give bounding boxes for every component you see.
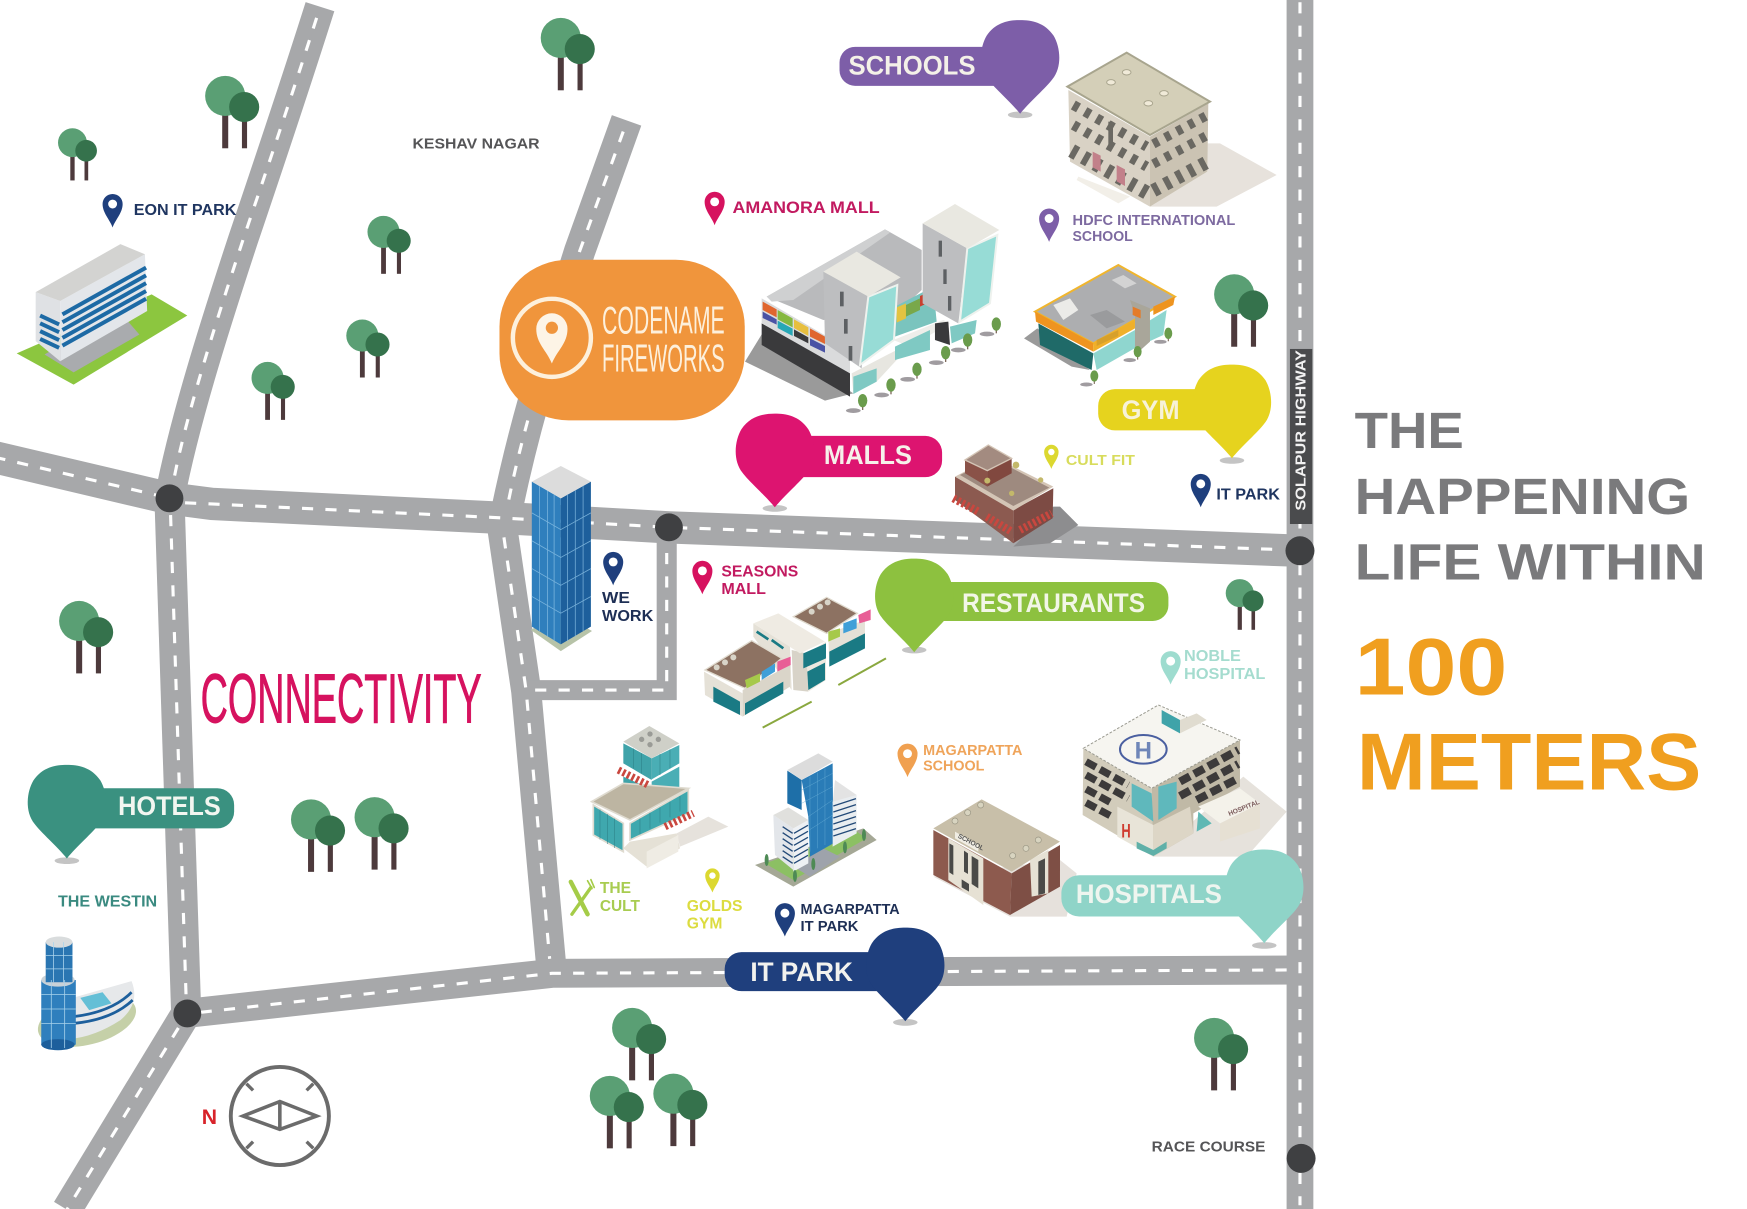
- label: Solapur Highway: [1290, 349, 1312, 524]
- callout pin: Malls: [736, 414, 942, 512]
- callout pin: Restaurants: [875, 559, 1168, 653]
- icon: red hospital H: H: [1121, 821, 1131, 842]
- label: The Westin: THE WESTIN: [58, 893, 157, 910]
- building: Noble Hospital: HOSPITAL: [1227, 799, 1261, 818]
- label: Amanora Mall: [705, 192, 880, 225]
- label: Keshav Nagar: KESHAV NAGAR: [413, 135, 540, 152]
- label: We Work: [602, 552, 654, 625]
- icon: compass: [202, 1067, 329, 1165]
- icon: fork and knife: [571, 880, 594, 914]
- label: Golds Gym: GOLDS: [687, 898, 743, 915]
- building: The Cult: [592, 726, 728, 868]
- title: The Happening Life Within: [1355, 402, 1706, 591]
- callout pin: Restaurants: RESTAURANTS: [962, 588, 1145, 618]
- callout pin: Gym: GYM: [1122, 395, 1180, 425]
- label: The Cult: [571, 880, 640, 915]
- label: IT Park: IT PARK: [1216, 486, 1281, 503]
- callout pin: Gym: [1098, 365, 1271, 464]
- icon: location ring: [513, 299, 591, 377]
- trees: [58, 18, 1268, 1148]
- label: Magarpatta IT Park: MAGARPATTA: [800, 902, 900, 918]
- map base: roads, junctions, trees: [0, 0, 1316, 1209]
- label: Golds Gym: [687, 868, 743, 933]
- label: HDFC International School: SCHOOL: [1073, 229, 1133, 245]
- icon: helipad: H: [1135, 737, 1152, 764]
- junction markers: [156, 484, 1316, 1173]
- label: Noble Hospital: [1161, 648, 1266, 685]
- label: HDFC International School: HDFC INTERNATIONAL: [1073, 213, 1235, 229]
- building: HDFC International School: [1067, 53, 1277, 207]
- callout pin: Malls: MALLS: [824, 440, 912, 470]
- label: Eon IT Park: [103, 194, 237, 227]
- label: Magarpatta School: SCHOOL: [923, 758, 985, 774]
- building: Magarpatta IT Park towers: [755, 753, 877, 887]
- icon: compass: N: [202, 1106, 217, 1129]
- title: 100 Meters: METERS: [1357, 717, 1701, 807]
- title: 100 Meters: [1355, 623, 1701, 807]
- building: Noble Hospital: [1083, 705, 1287, 857]
- callout pin: Hotels: [28, 765, 234, 864]
- label: Seasons Mall: SEASONS: [721, 563, 798, 580]
- label: Cult Fit: CULT FIT: [1066, 452, 1136, 469]
- building: Amanora Mall: [745, 204, 1001, 413]
- callout pin: Schools: [840, 20, 1059, 118]
- callout pin: Hospitals: HOSPITALS: [1076, 879, 1222, 909]
- label: Noble Hospital: NOBLE: [1184, 648, 1241, 665]
- label: Magarpatta IT Park: IT PARK: [800, 919, 859, 935]
- label: Magarpatta IT Park: [775, 902, 900, 937]
- title: The Happening Life Within: HAPPENING: [1355, 468, 1690, 525]
- label: We Work: WE: [602, 590, 630, 607]
- callout pin: IT Park: IT PARK: [750, 957, 854, 987]
- label: Golds Gym: GYM: [687, 916, 722, 933]
- callout: Codename Fireworks: FIREWORKS: [602, 337, 725, 380]
- heading: Connectivity: CONNECTIVITY: [201, 659, 482, 737]
- title: The Happening Life Within: THE: [1355, 402, 1464, 459]
- callout pin: IT Park: [725, 928, 944, 1026]
- label: The Cult: THE: [600, 880, 631, 897]
- label: Seasons Mall: MALL: [721, 581, 766, 598]
- label: IT Park: [1191, 474, 1281, 507]
- label: Eon IT Park: EON IT PARK: [134, 202, 237, 219]
- building: Eon IT Park: [17, 244, 187, 385]
- label: Seasons Mall: [692, 561, 798, 598]
- label: HDFC International School: [1039, 208, 1235, 245]
- label: Race Course: RACE COURSE: [1152, 1139, 1265, 1156]
- building: brick restaurant: [953, 445, 1078, 547]
- label: The Cult: CULT: [600, 898, 640, 915]
- label: Noble Hospital: HOSPITAL: [1184, 666, 1266, 683]
- callout pin: Hotels: HOTELS: [118, 791, 221, 821]
- title: The Happening Life Within: LIFE WITHIN: [1355, 534, 1706, 591]
- label: We Work: WORK: [602, 608, 654, 625]
- callout pin: Hospitals: [1061, 850, 1303, 949]
- callout: Codename Fireworks: CODENAME: [602, 299, 725, 342]
- label: Amanora Mall: AMANORA MALL: [732, 199, 880, 217]
- building: Cult Fit gym: [1024, 265, 1175, 386]
- title: 100 Meters: 100: [1355, 623, 1507, 713]
- building: Magarpatta School: [933, 799, 1077, 917]
- building: Seasons Mall: [704, 597, 886, 728]
- label: Magarpatta School: MAGARPATTA: [923, 743, 1023, 759]
- label: Magarpatta School: [897, 743, 1023, 777]
- callout pin: Schools: SCHOOLS: [848, 51, 976, 81]
- building: The Westin: [32, 937, 142, 1056]
- callout: Codename Fireworks: [499, 260, 745, 420]
- label: Solapur Highway: SOLAPUR HIGHWAY: [1294, 350, 1310, 511]
- road network: [0, 0, 1300, 1209]
- icon: helipad: [1120, 735, 1167, 764]
- building: We Work tower: [531, 466, 592, 651]
- building: Magarpatta School: SCHOOL: [956, 833, 985, 852]
- label: Cult Fit: [1044, 445, 1136, 469]
